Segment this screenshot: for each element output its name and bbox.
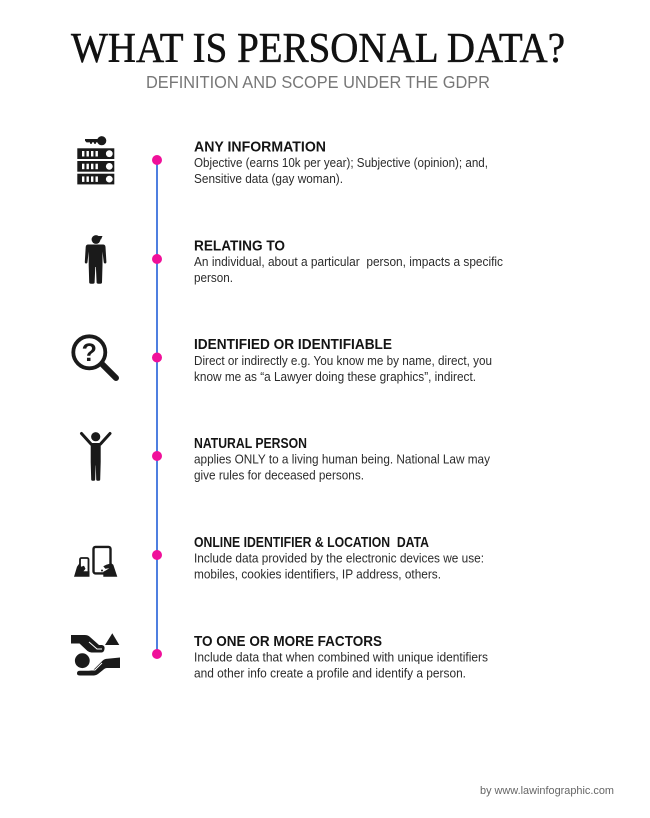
item: online identifier and location data: mobiles, cookies identifiers, IP address, others. [194, 568, 441, 582]
subtitle: DEFINITION AND SCOPE UNDER THE GDPR [146, 72, 490, 92]
item: relating to [194, 238, 503, 285]
credit: by www.lawinfographic.com [480, 785, 614, 797]
icon: person [85, 235, 106, 284]
item: any information: Objective (earns 10k per year); Subjective (opinion); and, [194, 156, 488, 170]
item: identified or identifiable: know me as “a Lawyer doing these graphics”, indirect. [194, 370, 476, 384]
item: relating to: person. [194, 271, 233, 285]
item: identified or identifiable: IDENTIFIED OR IDENTIFIABLE [194, 336, 392, 353]
icon: hands holding phone and tablet [74, 547, 117, 577]
icon: magnifier with question mark: ? [82, 339, 97, 367]
timeline [152, 155, 162, 659]
icon: key and servers [77, 136, 114, 184]
item: to one or more factors: and other info create a profile and identify a person. [194, 666, 466, 680]
item: any information [194, 138, 488, 186]
icon: hands exchanging shapes [71, 633, 120, 676]
item: online identifier and location data: Include data provided by the electronic devices we use: [194, 552, 484, 566]
icon: person with raised arms [82, 432, 110, 481]
item: online identifier and location data [194, 534, 484, 582]
item: identified or identifiable: Direct or indirectly e.g. You know me by name, direct, you [194, 354, 492, 368]
icon: magnifier with question mark [73, 336, 116, 378]
item: identified or identifiable [194, 336, 492, 384]
item: to one or more factors: Include data that when combined with unique identifiers [194, 650, 488, 664]
item: to one or more factors: TO ONE OR MORE FACTORS [194, 633, 382, 650]
item: relating to: An individual, about a particular person, impacts a specific [194, 255, 503, 269]
item: any information: ANY INFORMATION [194, 138, 326, 156]
item: to one or more factors [194, 633, 488, 680]
item: online identifier and location data: ONLINE IDENTIFIER & LOCATION DATA [194, 534, 429, 551]
item: any information: Sensitive data (gay woman). [194, 172, 343, 186]
title: WHAT IS PERSONAL DATA? [71, 26, 565, 72]
item: relating to: RELATING TO [194, 238, 285, 254]
item: natural person [194, 435, 491, 482]
item: natural person: NATURAL PERSON [194, 435, 307, 452]
item: natural person: applies ONLY to a living human being. National Law may [194, 452, 491, 466]
item: natural person: give rules for deceased persons. [194, 468, 364, 482]
